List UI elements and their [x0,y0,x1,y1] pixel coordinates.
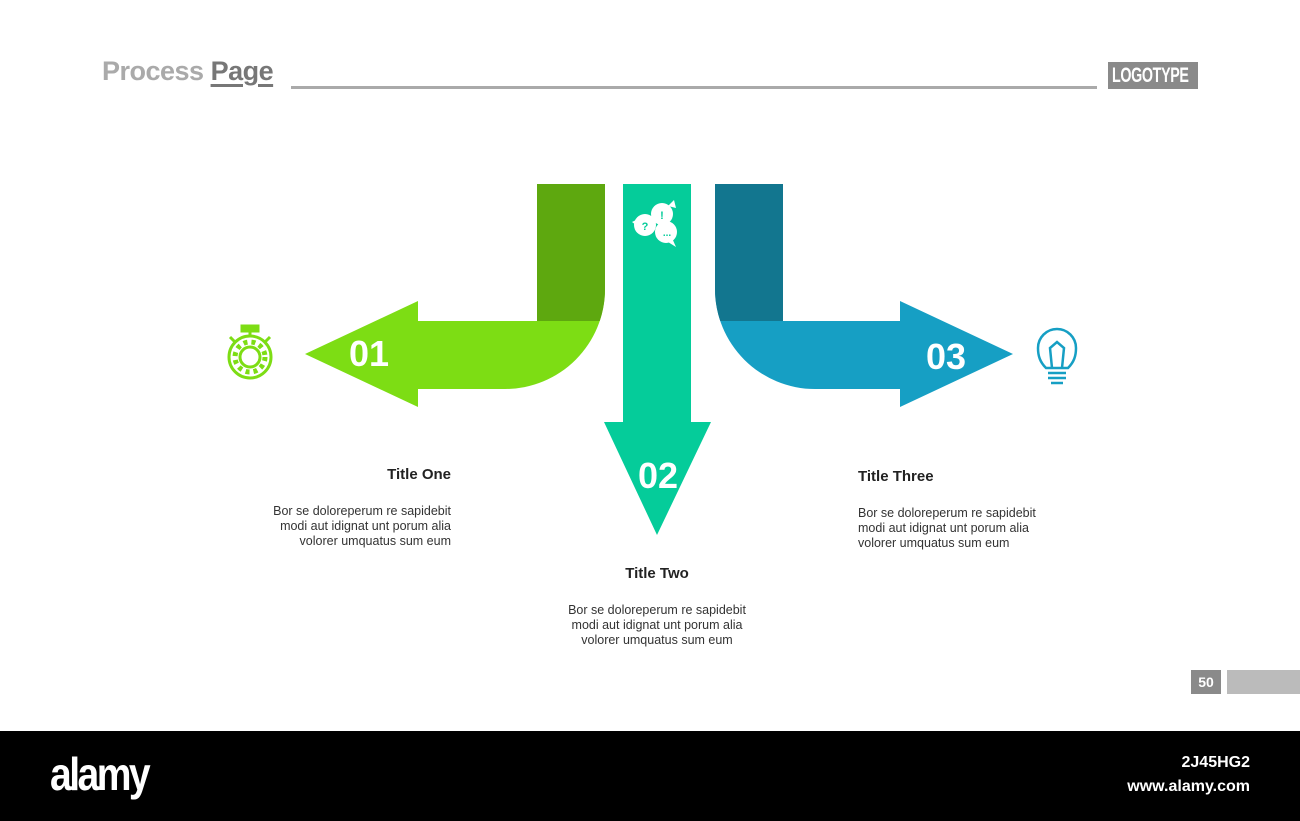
title: Process Page [102,56,273,86]
icon: speech bubbles: ? [642,221,649,233]
arrow 01: 01 [349,333,389,374]
text: title one: Bor se doloreperum re sapidebit [273,504,451,518]
text: title one: Title One [387,466,451,483]
text: title two: Title Two [625,565,689,582]
text: title two [568,565,746,647]
arrow 03 [715,184,1013,407]
icon: speech bubbles: ... [663,228,671,239]
text: title two: volorer umquatus sum eum [581,633,733,647]
logotype: LOGOTYPE [1112,64,1189,87]
footer band: 2J45HG2 [1182,754,1250,771]
text: title one: modi aut idignat unt porum alia [280,519,451,533]
arrow 03: 03 [926,336,966,377]
page number [1191,670,1221,694]
footer band [0,731,1300,821]
icon: stopwatch [229,326,271,378]
text: title one [273,466,451,548]
text: title three: volorer umquatus sum eum [858,536,1009,550]
icon: speech bubbles [632,200,677,247]
text: title three: Bor se doloreperum re sapidebit [858,506,1036,520]
icon: speech bubbles: ! [660,210,664,222]
page number: 50 [1198,674,1214,690]
arrow 02: 02 [638,455,678,496]
text: title three: Title Three [858,468,934,485]
text: title one: volorer umquatus sum eum [300,534,451,548]
text: title two: Bor se doloreperum re sapidebit [568,603,746,617]
arrow 02 [604,184,711,535]
footer band: alamy [50,748,148,800]
footer band: www.alamy.com [1127,778,1250,795]
text: title three [858,468,1036,550]
arrow 01 [305,184,605,407]
icon: light bulb [1038,329,1076,383]
text: title three: modi aut idignat unt porum alia [858,521,1029,535]
diagram [228,184,1078,535]
text: title two: modi aut idignat unt porum alia [572,618,742,632]
